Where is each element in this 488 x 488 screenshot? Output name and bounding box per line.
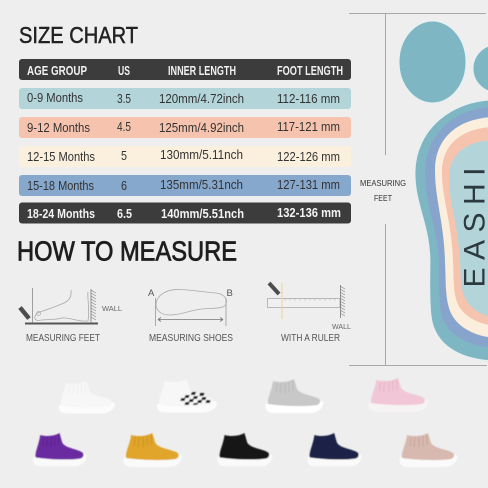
shoe: purple <box>33 433 87 466</box>
label: measuring shoes: MEASURING SHOES <box>149 333 233 344</box>
icon: big toe <box>399 21 466 103</box>
row: 15-18 months: 15-18 Months <box>27 179 94 193</box>
shoes collection <box>33 378 457 467</box>
table header row <box>19 59 351 80</box>
row: 18-24 months: 18-24 Months <box>27 207 95 221</box>
label: with a ruler: WITH A RULER <box>281 333 340 344</box>
icon: measuring shoes diagram: A <box>148 288 155 299</box>
illustration: foot <box>399 21 488 361</box>
shoe: white with checkered pattern <box>157 379 217 413</box>
row: 15-18 months: 135mm/5.31nch <box>160 178 243 192</box>
icon: measuring shoes diagram <box>148 288 233 326</box>
row: 9-12 months: 4.5 <box>117 120 131 134</box>
foot layer: teal <box>415 100 488 361</box>
shoe: beige <box>399 433 457 467</box>
row: 12-15 months: 130mm/5.11nch <box>160 148 243 162</box>
label: measuring feet (side): FEET <box>374 193 392 203</box>
label: measuring feet (side) <box>360 178 406 203</box>
icon: ruler diagram <box>268 283 345 319</box>
row: 18-24 months: 140mm/5.51nch <box>161 207 244 221</box>
shoe: white <box>58 381 115 414</box>
label: measuring feet: MEASURING FEET <box>26 333 100 344</box>
icon: measuring feet diagram <box>20 288 98 324</box>
row: 0-9 months: 0-9 Months <box>27 91 83 105</box>
measuring frame lines <box>349 13 487 366</box>
row: 9-12 months: 9-12 Months <box>27 121 90 135</box>
row: 9-12 months <box>19 117 351 138</box>
row: 0-9 months <box>19 88 351 109</box>
row: 12-15 months <box>19 146 351 167</box>
shoe: mustard <box>123 433 182 467</box>
row: 12-15 months: 122-126 mm <box>277 150 340 164</box>
row: 12-15 months: 5 <box>121 149 127 163</box>
row: 12-15 months: 12-15 Months <box>27 150 95 164</box>
row: 9-12 months: 125mm/4.92inch <box>159 121 244 135</box>
label: wall (feet): WALL <box>102 304 122 313</box>
row: 15-18 months <box>19 175 351 196</box>
foot layer: blue <box>425 107 488 348</box>
shoe: grey <box>265 379 323 413</box>
row: 0-9 months: 112-116 mm <box>277 92 340 106</box>
table header row: AGE GROUP <box>27 64 87 78</box>
row: 15-18 months: 6 <box>121 179 127 193</box>
icon: measuring shoes diagram: B <box>226 288 233 299</box>
row: 18-24 months: 132-136 mm <box>277 206 341 220</box>
foot layer: light teal <box>449 140 488 318</box>
row: 15-18 months: 127-131 mm <box>277 178 340 192</box>
shoe: pink <box>368 378 428 412</box>
shoe: navy <box>307 433 362 466</box>
foot layer: peach <box>442 127 488 326</box>
shoe: black <box>217 433 272 466</box>
foot layer: cream <box>435 117 488 338</box>
row: 18-24 months <box>19 202 351 224</box>
label: measuring feet (side): MEASURING <box>360 178 406 188</box>
table header row: FOOT LENGTH <box>277 64 343 78</box>
table header row: INNER LENGTH <box>168 64 236 78</box>
table header row: US <box>118 64 130 78</box>
icon: second toe <box>473 44 488 92</box>
row: 0-9 months: 3.5 <box>117 92 131 106</box>
size chart table <box>19 59 351 224</box>
heading: how to measure: HOW TO MEASURE <box>17 236 237 266</box>
row: 9-12 months: 117-121 mm <box>277 120 340 134</box>
title: size chart: SIZE CHART <box>19 22 138 48</box>
label: wall (ruler): WALL <box>332 322 351 331</box>
row: 0-9 months: 120mm/4.72inch <box>159 92 244 106</box>
row: 18-24 months: 6.5 <box>117 207 132 221</box>
